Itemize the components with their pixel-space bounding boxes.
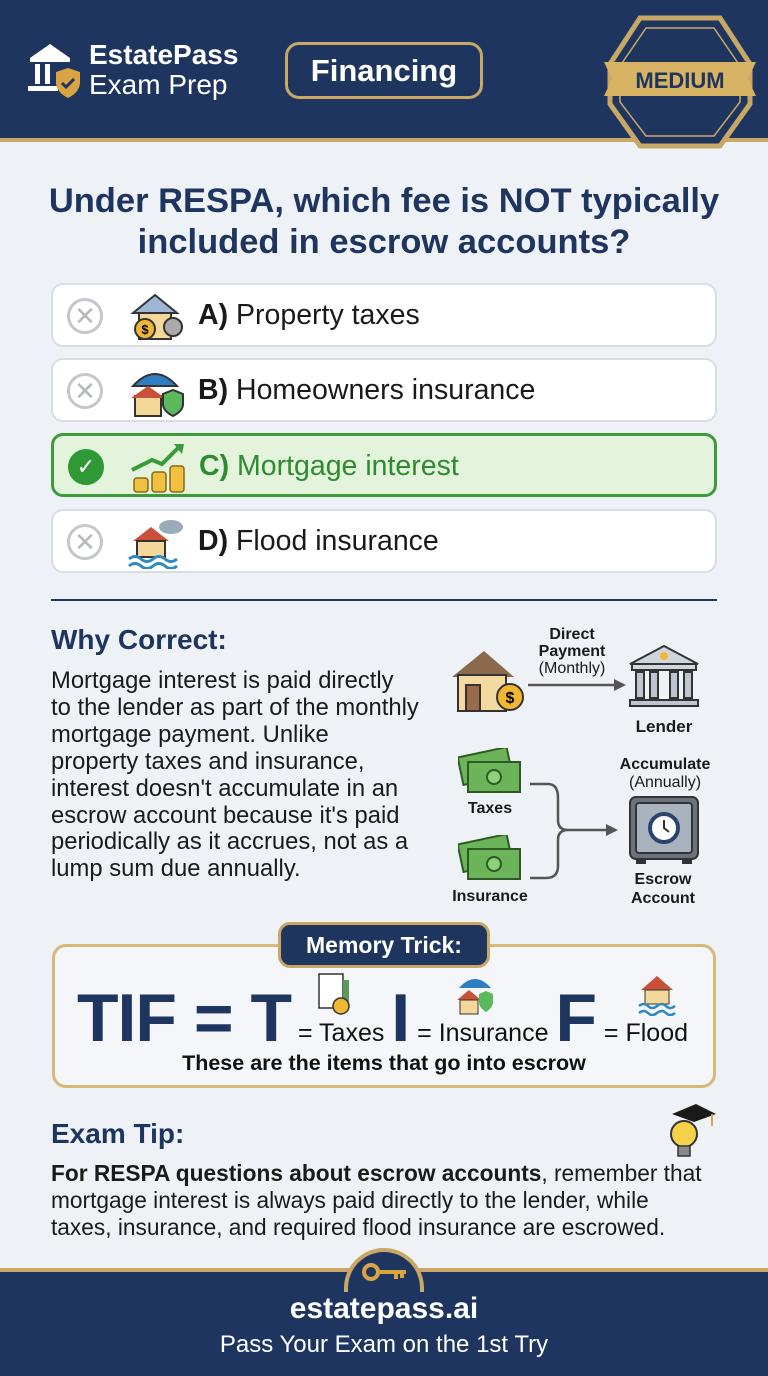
icon: flooded house: [638, 976, 676, 1016]
caption: These are the items that go into escrow: [182, 1051, 586, 1075]
option A: [51, 283, 717, 347]
explanation text: periodically as it accrues, not as a: [51, 828, 408, 855]
diagram: [452, 626, 710, 907]
exam tip heading: Exam Tip:: [51, 1118, 184, 1149]
exam tip text: [51, 1160, 702, 1240]
explanation text: [51, 667, 419, 882]
explanation text: lump sum due annually.: [51, 855, 301, 882]
brand text: [89, 39, 238, 100]
memory trick label: [278, 922, 490, 968]
brand text: EstatePass: [89, 39, 238, 70]
question title: Under RESPA, which fee is NOT typically included in escrow accounts?: [49, 182, 719, 261]
icon: house with coin: [452, 651, 524, 712]
brand text: Exam Prep: [89, 69, 228, 100]
arrow: to lender: [528, 679, 626, 691]
label: accumulate: (Annually): [629, 774, 701, 791]
icon: house with coin: $: [506, 690, 515, 707]
label: accumulate: Accumulate: [620, 756, 710, 773]
icon: tax doc: [318, 973, 350, 1015]
explanation text: property taxes and insurance,: [51, 748, 365, 775]
label: direct payment: (Monthly): [539, 660, 605, 677]
option C correct: ✓: [77, 454, 95, 479]
icon: taxes money: [458, 748, 521, 793]
option B: ✕: [74, 376, 96, 406]
label: lender: Lender: [636, 717, 692, 736]
explanation text: escrow account because it's paid: [51, 802, 399, 829]
memory trick box: [52, 944, 716, 1088]
memory trick label: Memory Trick:: [306, 932, 462, 958]
difficulty badge: MEDIUM: [635, 68, 725, 93]
label: escrow account: Account: [631, 890, 695, 907]
option D: D) Flood insurance: [198, 525, 439, 557]
option B: [51, 358, 717, 422]
category pill: [285, 42, 483, 99]
explanation text: mortgage payment. Unlike: [51, 721, 329, 748]
option A: ✕: [74, 301, 96, 331]
logo icon: [28, 44, 80, 98]
mnemonic: TIF = T = Taxes I = Insurance F = Flood: [77, 980, 688, 1056]
option D: [51, 509, 717, 573]
exam tip text: For RESPA questions about escrow accounts, remember that: [51, 1160, 702, 1186]
explanation text: interest doesn't accumulate in an: [51, 775, 398, 802]
footer tagline: Pass Your Exam on the 1st Try: [220, 1331, 548, 1358]
header: [0, 0, 768, 142]
footer bump with key: [344, 1248, 424, 1292]
footer site: estatepass.ai: [290, 1292, 478, 1325]
why correct heading: Why Correct:: [51, 624, 227, 655]
label: direct payment: [539, 626, 606, 677]
label: direct payment: Direct: [549, 626, 595, 643]
exam tip text: mortgage interest is always paid directly to the lender, while: [51, 1187, 649, 1213]
label: accumulate: [620, 756, 710, 791]
footer: [0, 1268, 768, 1376]
category pill: Financing: [311, 53, 457, 88]
arrow: merge to escrow: [530, 782, 618, 880]
label: insurance: Insurance: [452, 888, 528, 905]
option C correct: [51, 433, 717, 497]
option D: ✕: [74, 527, 96, 557]
icon: safe: [629, 796, 699, 864]
icon: insurance money: [458, 835, 521, 880]
exam tip text: taxes, insurance, and required flood insurance are escrowed.: [51, 1214, 665, 1240]
label: escrow account: Escrow: [635, 871, 691, 888]
explanation text: to the lender as part of the monthly: [51, 694, 419, 721]
icon: umbrella house: [457, 979, 493, 1014]
icon: lightbulb with cap: [670, 1104, 716, 1157]
label: escrow account: [631, 871, 695, 907]
difficulty badge: [604, 16, 756, 148]
icon: lender bank: [629, 644, 699, 707]
option C correct: C) Mortgage interest: [199, 450, 459, 482]
option A: A) Property taxes: [198, 299, 420, 331]
option A: $: [141, 322, 149, 337]
explanation text: Mortgage interest is paid directly: [51, 667, 394, 694]
option B: B) Homeowners insurance: [198, 374, 535, 406]
label: direct payment: Payment: [539, 643, 605, 660]
label: taxes: Taxes: [468, 800, 512, 817]
